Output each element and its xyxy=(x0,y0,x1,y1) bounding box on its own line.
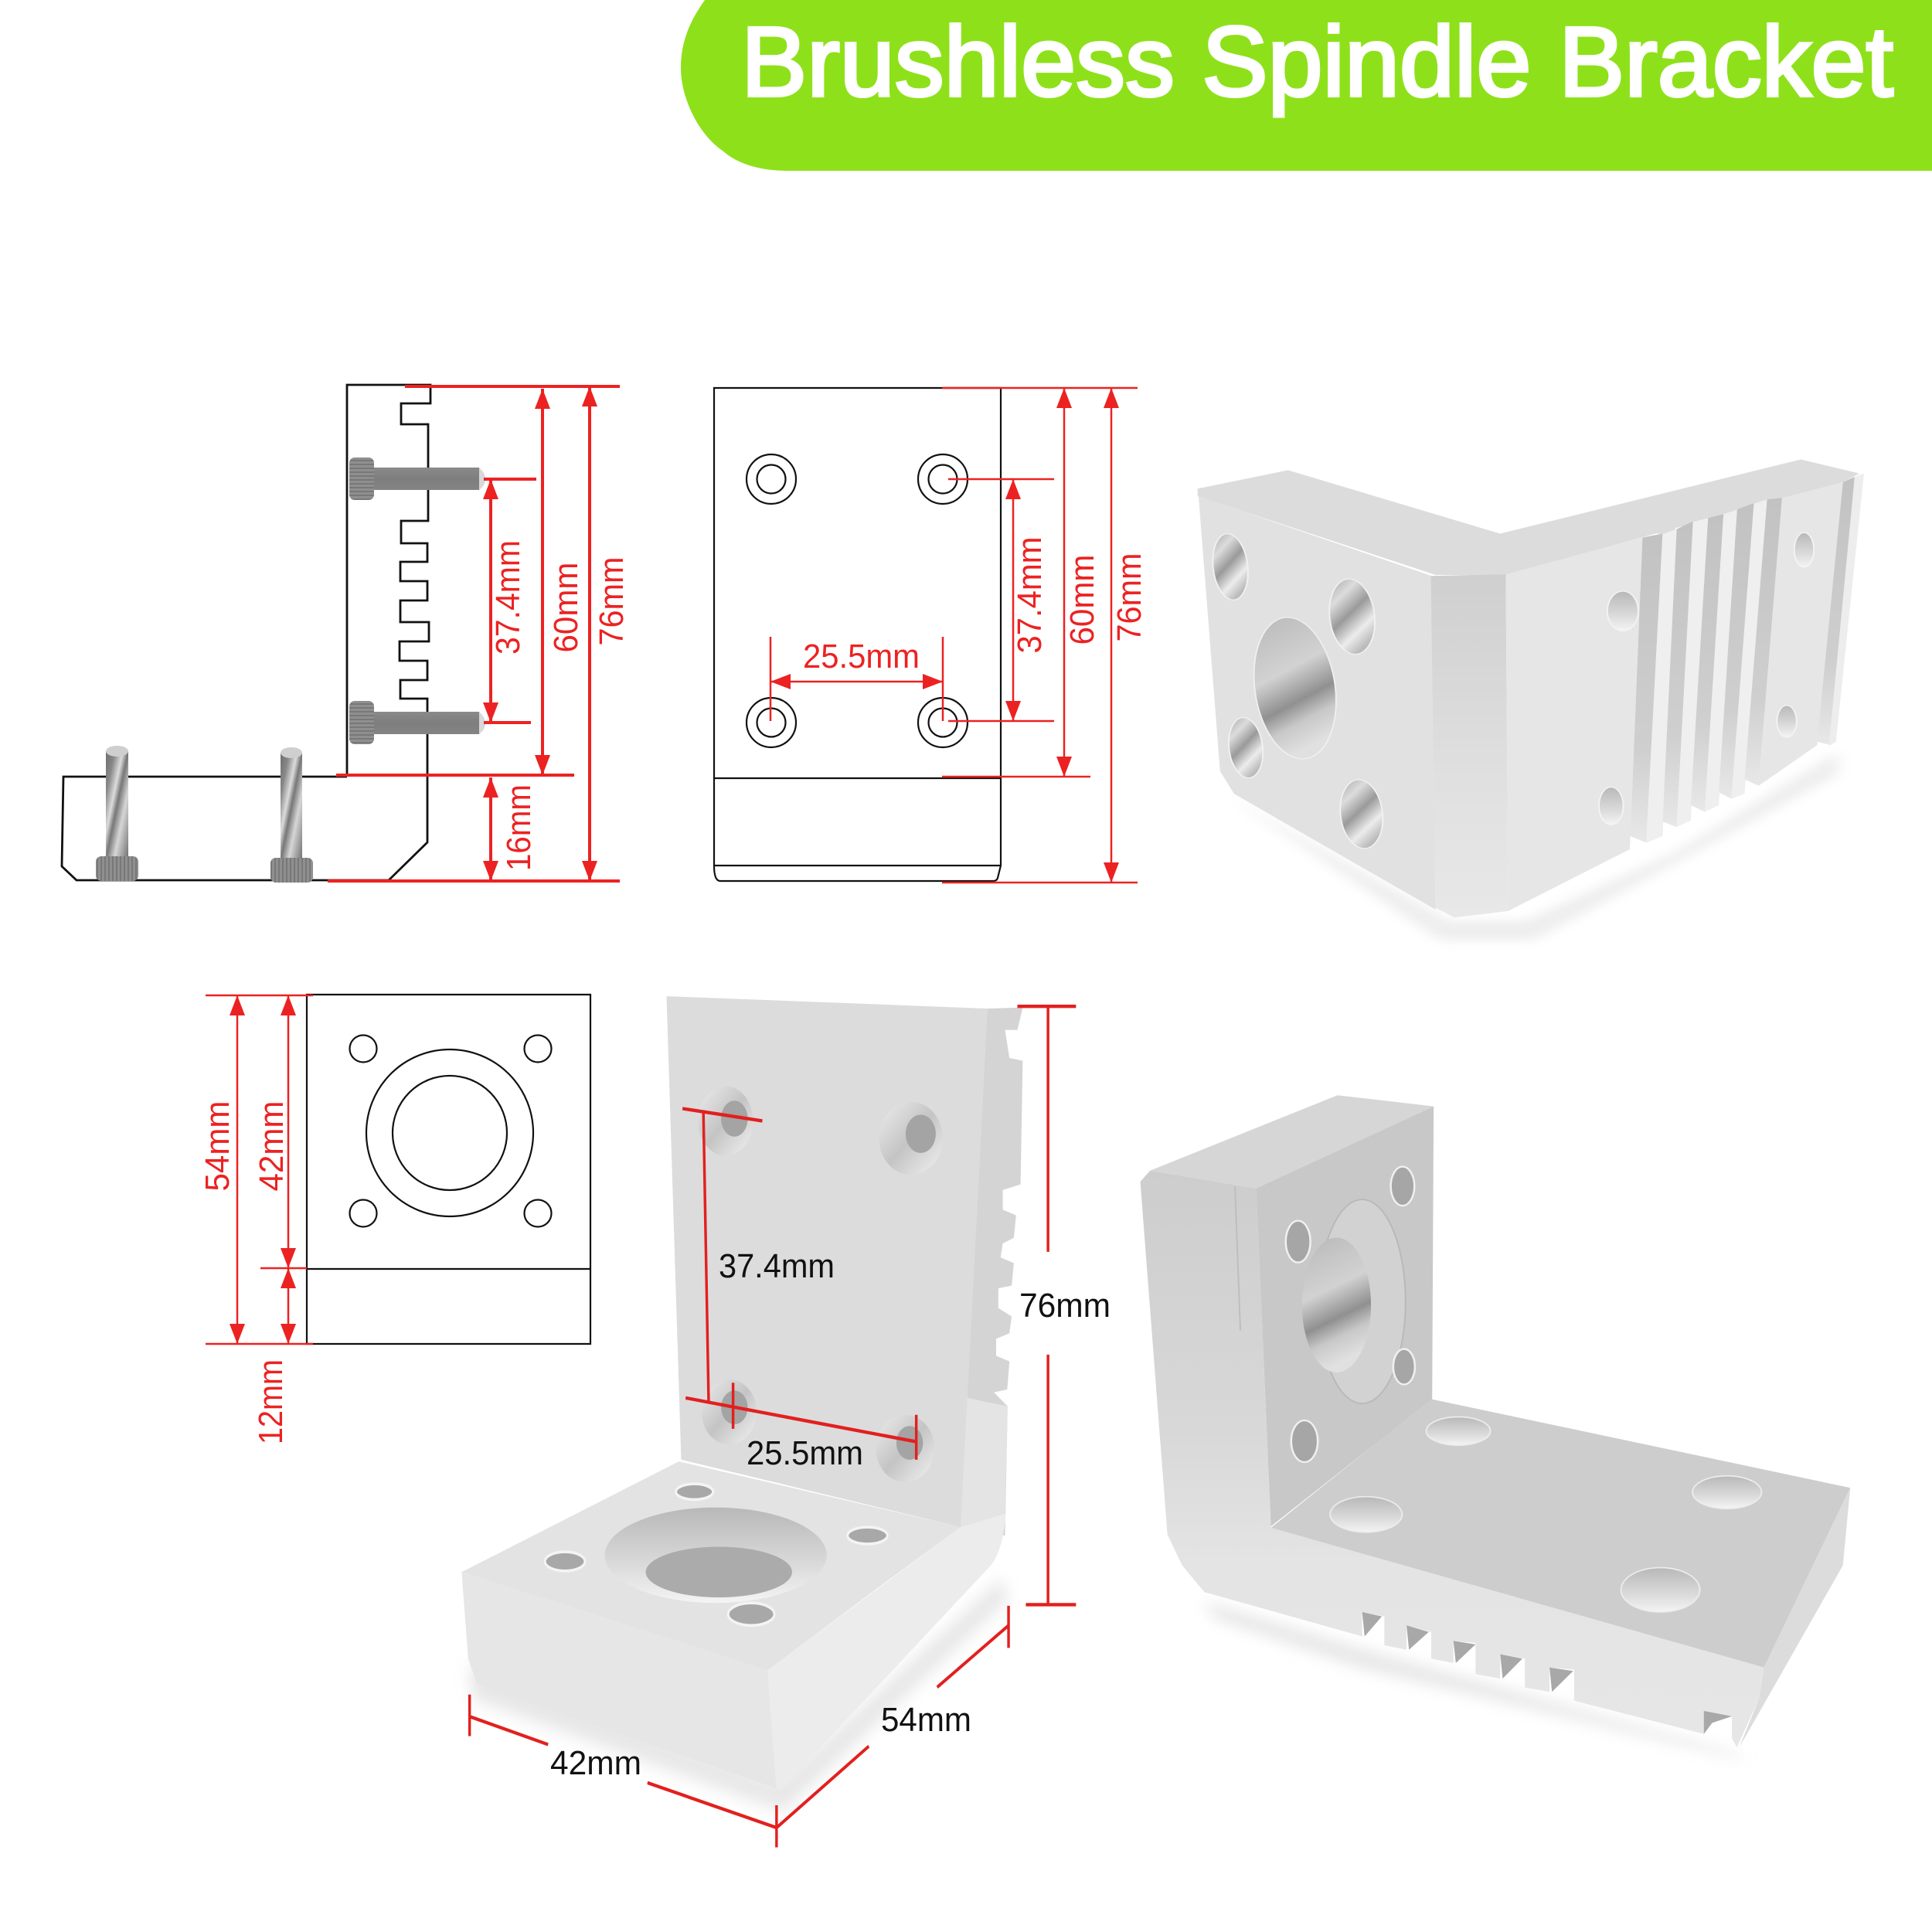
side view outline xyxy=(62,385,430,880)
last fin xyxy=(1817,477,1855,745)
vertical 37.4 dimension lines xyxy=(682,1108,917,1460)
plate holes xyxy=(698,1086,943,1482)
label 37.4mm: 37.4mm xyxy=(719,1247,835,1285)
label 25.5mm: 25.5mm xyxy=(803,638,920,675)
label 60mm: 60mm xyxy=(1063,555,1101,645)
motor boss xyxy=(1318,1199,1406,1403)
shadow xyxy=(1225,752,1838,940)
dimension extension lines xyxy=(328,386,620,881)
upper horizontal screw xyxy=(349,457,485,500)
top face xyxy=(1198,460,1859,575)
54mm dimension lines xyxy=(777,1606,1009,1847)
bearing rings xyxy=(366,1049,533,1216)
right vertical screw xyxy=(270,747,313,883)
upper right counterbore xyxy=(879,1102,943,1175)
back view outline xyxy=(714,388,1001,881)
inner upright face xyxy=(1256,1107,1434,1526)
dimension arrows xyxy=(491,386,590,881)
base holes xyxy=(545,1484,887,1625)
label 76mm: 76mm xyxy=(593,556,631,646)
side edge line xyxy=(1235,1186,1240,1330)
side holes xyxy=(1599,532,1814,825)
label 42mm: 42mm xyxy=(550,1744,641,1782)
76mm dimension lines xyxy=(1018,1006,1076,1604)
mounting holes xyxy=(747,454,968,747)
corner holes xyxy=(349,1036,552,1227)
front view drawing with dimensions xyxy=(199,995,590,1444)
label 54mm: 54mm xyxy=(881,1701,971,1739)
base holes xyxy=(1330,1417,1761,1612)
fins edge xyxy=(961,1008,1022,1536)
back plate face xyxy=(666,996,988,1527)
outer side and front with fins xyxy=(1141,1171,1764,1747)
dimension extension lines xyxy=(206,995,313,1344)
top of upright xyxy=(1150,1095,1434,1189)
base side face xyxy=(767,1513,1006,1790)
title text: Brushless Spindle Bracket xyxy=(741,7,1893,117)
lower fillet of plate xyxy=(961,1398,1008,1527)
shadow xyxy=(1204,1601,1747,1760)
shadow xyxy=(468,1580,1009,1811)
motor bore xyxy=(1302,1237,1371,1372)
central bore xyxy=(1246,615,1344,761)
front holes xyxy=(1209,533,1386,849)
label 37.4mm: 37.4mm xyxy=(489,540,527,655)
label 76mm: 76mm xyxy=(1019,1287,1111,1325)
chamfer band xyxy=(1430,574,1508,917)
label 42mm: 42mm xyxy=(253,1100,291,1192)
upper left counterbore xyxy=(698,1086,753,1156)
fin grooves xyxy=(1362,1612,1732,1734)
label 60mm: 60mm xyxy=(547,563,585,652)
base surface xyxy=(1271,1399,1850,1668)
lower horizontal screw xyxy=(349,701,485,744)
label 54mm: 54mm xyxy=(199,1100,236,1192)
lower right counterbore xyxy=(876,1415,934,1482)
left vertical screw xyxy=(96,746,138,881)
front view outline xyxy=(307,995,590,1344)
dimension arrows xyxy=(770,388,1111,883)
label 25.5mm: 25.5mm xyxy=(747,1434,863,1472)
base front face xyxy=(461,1572,777,1788)
right face xyxy=(1505,538,1642,911)
photo: bracket seen from the corner xyxy=(1198,460,1864,940)
42mm dimension lines xyxy=(470,1695,777,1828)
label 76mm: 76mm xyxy=(1111,553,1148,641)
label 16mm: 16mm xyxy=(500,784,538,871)
upright holes xyxy=(1286,1167,1415,1462)
lower left counterbore xyxy=(702,1379,757,1444)
dimension arrows xyxy=(237,995,288,1344)
label 12mm: 12mm xyxy=(252,1359,290,1444)
side view drawing with dimensions xyxy=(62,385,631,883)
front left face xyxy=(1199,496,1445,915)
base end face xyxy=(1740,1488,1850,1747)
label 37.4mm: 37.4mm xyxy=(1011,536,1049,654)
green banner shape xyxy=(681,0,1932,171)
cooling fins xyxy=(1625,498,1782,842)
dimension extension lines xyxy=(770,388,1138,883)
back view drawing with dimensions xyxy=(714,388,1148,883)
photo: bracket with flat base xyxy=(1141,1095,1850,1760)
photo: upright bracket xyxy=(461,996,1076,1847)
dimension labels on upright bracket xyxy=(550,1247,1111,1782)
outer block face xyxy=(1759,482,1843,786)
title banner xyxy=(681,0,1932,171)
base top face xyxy=(461,1461,961,1670)
base bore xyxy=(605,1508,827,1603)
